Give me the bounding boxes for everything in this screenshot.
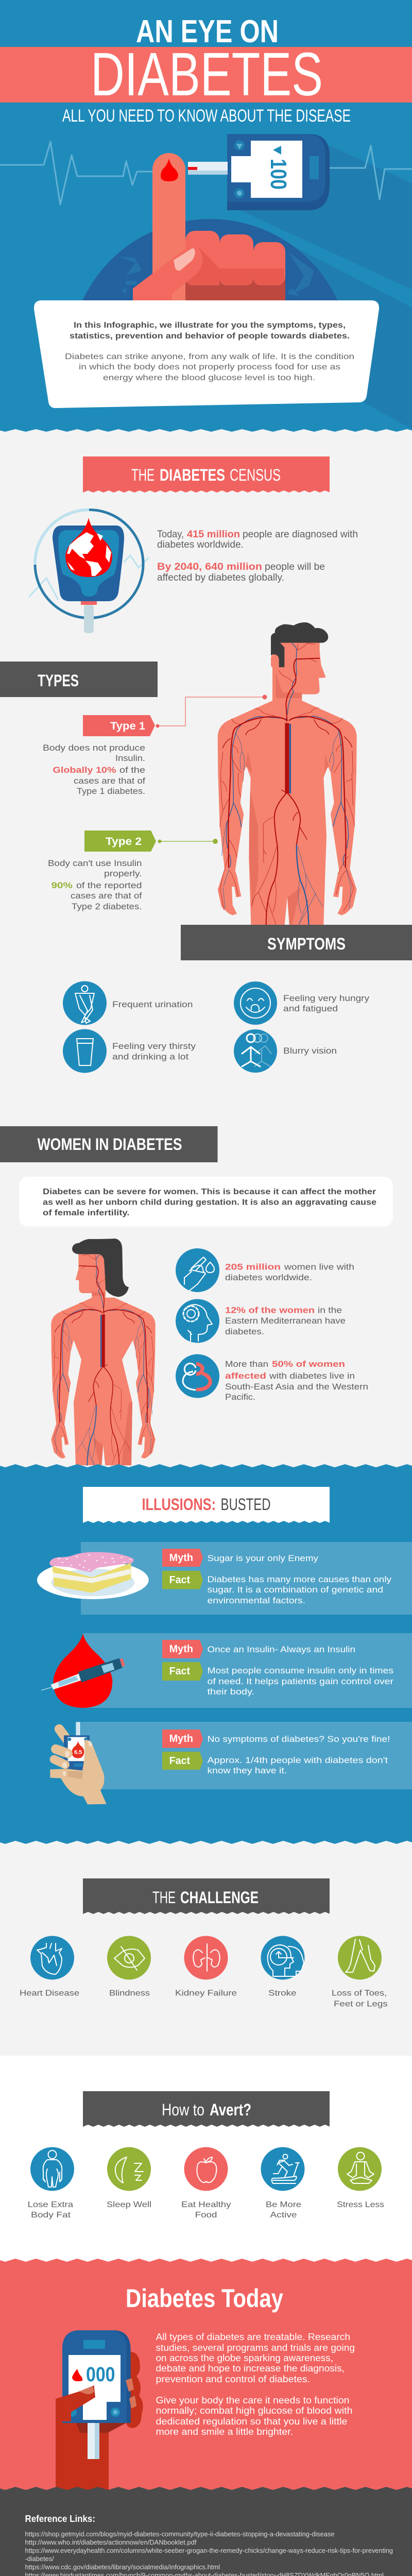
panel: myth 2: Most people consume insulin only in times xyxy=(207,1666,393,1675)
avert: lose body fat: Body Fat xyxy=(31,2211,71,2219)
avert: eat healthy food: Eat Healthy xyxy=(181,2200,231,2209)
connector: type 2 xyxy=(158,839,218,844)
panel: myth 1: environmental factors. xyxy=(207,1596,305,1605)
type 1 description: of the xyxy=(119,765,145,775)
stat: 12 percent xyxy=(225,1306,346,1336)
intro card: Diabetes can strike anyone, from any walk of life. It is the condition xyxy=(65,352,354,361)
type 1 description: cases are that of xyxy=(74,776,145,786)
panel: myth 3: know they have it. xyxy=(207,1766,287,1775)
panel: myth 1: Fact xyxy=(169,1574,190,1586)
census statistics: people are diagnosed with xyxy=(243,529,358,540)
label: blurry vision: Blurry vision xyxy=(283,1046,337,1056)
panel: myth 1: sugar. It is a combination of genetic and xyxy=(207,1585,383,1595)
challenge: blindness xyxy=(107,1936,151,1998)
challenge: heart disease xyxy=(20,1936,79,1998)
icon: mother and child xyxy=(176,1354,219,1398)
illustration: blood drop and insulin pen xyxy=(41,1634,125,1708)
heading: women in diabetes xyxy=(0,1126,217,1162)
type 2 description: of the reported xyxy=(76,880,142,890)
label: thirsty: and drinking a lot xyxy=(112,1052,188,1062)
challenge: heart disease: Heart Disease xyxy=(20,1989,79,1998)
illustration: cake on plate xyxy=(37,1552,149,1599)
challenge: loss of toes xyxy=(332,1936,387,2008)
women intro card: Diabetes can be severe for women. This is because it can affect the mother xyxy=(43,1188,376,1196)
stat: 12 percent: 12% of the women xyxy=(225,1306,315,1315)
women intro card: as well as her unborn child during gestation. It is also an aggravating cause xyxy=(43,1198,376,1207)
stat: 50 percent: with diabetes live in xyxy=(269,1371,355,1381)
heading: the challenge xyxy=(83,1878,330,1914)
icon: frequent urination xyxy=(63,981,107,1025)
globe behind hand xyxy=(82,219,338,300)
title: An Eye On: AN EYE ON xyxy=(136,14,279,49)
panel: myth 3 xyxy=(81,1722,412,1789)
text: diabetes today: normally; combat high glucose of blood with xyxy=(156,2405,352,2416)
icon: finger prick xyxy=(176,1248,219,1292)
reference link list xyxy=(25,2531,393,2576)
reference link list: https://www.everydayhealth.com/columns/white-seeber-grogan-the-remedy-chicks/change-ways-reduce-risk-tips-for-preventing xyxy=(25,2547,393,2554)
census statistics: affected by diabetes globally. xyxy=(157,572,284,583)
reference link list: http://www.who.int/diabetes/actionnow/en/DANbooklet.pdf xyxy=(25,2539,197,2546)
type 2 description: Body can't use Insulin xyxy=(48,858,142,868)
panel: myth 3: Fact xyxy=(169,1755,190,1767)
text: diabetes today xyxy=(156,2332,355,2437)
panel: myth 3: No symptoms of diabetes? So you're fine! xyxy=(207,1734,390,1744)
women intro card xyxy=(19,1177,393,1226)
tag: type 1 xyxy=(83,715,155,736)
avert: lose body fat: Lose Extra xyxy=(28,2200,73,2209)
label: thirsty xyxy=(112,1041,196,1062)
panel: myth 2: Myth xyxy=(169,1643,193,1655)
intro card: In this Infographic, we illustrate for you the symptoms, types, xyxy=(74,321,346,330)
panel: myth 2: Fact xyxy=(169,1666,190,1677)
label: hungry and fatigued xyxy=(283,993,370,1013)
reference link list: -diabetes/ xyxy=(25,2555,54,2563)
avert: be more active xyxy=(261,2147,305,2219)
glucose meter: 100 xyxy=(266,159,291,190)
heading: symptoms: SYMPTOMS xyxy=(267,935,346,953)
icon: meter with globe drop xyxy=(29,510,149,633)
panel: myth 2 xyxy=(83,1633,412,1708)
hand with finger prick xyxy=(133,153,285,300)
text: diabetes today: prevention and control of diabetes. xyxy=(156,2374,310,2384)
label: thirsty: Feeling very thirsty xyxy=(112,1041,196,1051)
heading: illusions busted xyxy=(83,1487,330,1523)
panel: myth 1 xyxy=(81,1542,412,1615)
census statistics: diabetes worldwide. xyxy=(157,539,244,550)
avert: eat healthy food xyxy=(181,2147,231,2219)
heading: women in diabetes: WOMEN IN DIABETES xyxy=(37,1135,182,1154)
panel: myth 3: Approx. 1/4th people with diabetes don't xyxy=(207,1755,388,1765)
title: diabetes today: Diabetes Today xyxy=(126,2284,283,2313)
illustration: hand holding meter xyxy=(50,1722,107,1804)
stat: 50 percent: Pacific. xyxy=(225,1392,255,1402)
stat: 50 percent xyxy=(225,1359,368,1402)
challenge: loss of toes: Loss of Toes, xyxy=(332,1989,387,1998)
avert: lose body fat xyxy=(28,2147,74,2219)
female body with blood vessels xyxy=(0,1239,412,1467)
male body with blood vessels xyxy=(218,622,357,925)
type 2 description: 90% xyxy=(52,880,73,890)
intro card: in which the body does not properly process food for use as xyxy=(79,363,340,371)
avert: be more active: Be More xyxy=(266,2200,301,2209)
panel: myth 2: their body. xyxy=(207,1687,254,1697)
stat: 12 percent: in the xyxy=(318,1306,342,1315)
stat: 50 percent: South-East Asia and the Western xyxy=(225,1382,368,1392)
census statistics: 415 million xyxy=(187,529,240,540)
icon: head with gear xyxy=(176,1299,219,1343)
type 1 description: Insulin. xyxy=(115,753,145,763)
heading: how to avert xyxy=(83,2091,330,2127)
intro card: energy where the blood glucose level is too high. xyxy=(103,374,315,382)
stat: 205 million xyxy=(225,1262,354,1282)
heading: how to avert: Avert? xyxy=(210,2100,251,2119)
reference link list: https://shop.getmyid.com/blogs/myid-diabetes-community/type-ii-diabetes-stopping-a-devastating-disease xyxy=(25,2531,335,2538)
label: hungry and fatigued: Feeling very hungry xyxy=(283,993,370,1003)
stat: 205 million: 205 million xyxy=(225,1262,281,1272)
intro card xyxy=(34,300,379,408)
text: diabetes today: dedicated regulation so that you live a little xyxy=(156,2416,347,2427)
illustration: hand with meter: 000 xyxy=(86,2363,115,2386)
type 2 description: properly. xyxy=(104,869,142,878)
census statistics: Today, xyxy=(157,529,184,540)
icon: hungry face xyxy=(234,981,277,1025)
census statistics: people will be xyxy=(265,562,325,572)
text: diabetes today: more and smile a little brighter. xyxy=(156,2427,293,2437)
challenge: kidney failure xyxy=(175,1936,237,1998)
heading: the diabetes census: CENSUS xyxy=(230,466,281,484)
panel: myth 1: Diabetes has many more causes than only xyxy=(207,1574,392,1584)
heartbeat line xyxy=(0,142,412,205)
type 1 description xyxy=(43,743,145,796)
reference link list: https://www.cdc.gov/diabetes/library/socialmedia/infographics.html xyxy=(25,2564,220,2571)
avert: be more active: Active xyxy=(270,2211,297,2219)
panel: myth 1: Myth xyxy=(169,1552,193,1564)
illustration: hand with meter xyxy=(56,2330,143,2490)
heading: symptoms xyxy=(181,925,412,960)
label: hungry and fatigued: and fatigued xyxy=(283,1004,338,1013)
type 1 description: Body does not produce xyxy=(43,743,145,753)
avert: sleep well: Sleep Well xyxy=(107,2200,151,2209)
type 2 description: Type 2 diabetes. xyxy=(72,902,142,911)
census statistics: By 2040, 640 million xyxy=(157,562,262,572)
heading: how to avert: How to xyxy=(162,2100,204,2119)
stat: 205 million: diabetes worldwide. xyxy=(225,1273,312,1282)
type 1 description: Type 1 diabetes. xyxy=(77,786,145,796)
title: Diabetes: DIABETES xyxy=(91,40,323,109)
heading: the challenge: THE xyxy=(152,1888,176,1907)
heading: types xyxy=(0,662,158,697)
stat: 50 percent: 50% of women xyxy=(272,1359,345,1369)
type 1 description: Globally 10% xyxy=(53,765,116,775)
census statistics xyxy=(157,529,358,583)
challenge: blindness: Blindness xyxy=(109,1989,150,1998)
glucose meter xyxy=(188,134,330,210)
heading: reference links: Reference Links: xyxy=(25,2514,95,2524)
stat: 50 percent: More than xyxy=(225,1359,268,1369)
panel: myth 2: of need. It helps patients gain control over xyxy=(207,1676,393,1686)
type 2 description xyxy=(48,858,142,911)
avert: sleep well xyxy=(107,2147,151,2209)
avert: stress less: Stress Less xyxy=(337,2200,384,2209)
heading: the diabetes census: DIABETES xyxy=(160,466,225,484)
intro card: statistics, prevention and behavior of people towards diabetes. xyxy=(70,332,350,341)
tag: type 2 xyxy=(84,831,156,852)
label: frequent urination: Frequent urination xyxy=(112,999,193,1009)
challenge: stroke xyxy=(261,1936,305,1998)
heading: illusions busted: ILLUSIONS: xyxy=(142,1495,216,1514)
text: diabetes today: studies, several programs and trials are going xyxy=(156,2343,355,2353)
text: diabetes today: All types of diabetes are treatable. Research xyxy=(156,2332,350,2342)
challenge: kidney failure: Kidney Failure xyxy=(175,1989,237,1998)
panel: myth 1: Sugar is your only Enemy xyxy=(207,1553,319,1563)
type 2 description: cases are that of xyxy=(71,891,142,901)
avert: stress less xyxy=(337,2147,384,2209)
heading: the challenge: CHALLENGE xyxy=(180,1888,259,1907)
connector: type 1 xyxy=(156,694,267,727)
panel: myth 2: Once an Insulin- Always an Insulin xyxy=(207,1645,355,1654)
hero long shadows xyxy=(227,143,412,429)
tag: type 1: Type 1 xyxy=(110,720,145,732)
stat: 205 million: women live with xyxy=(284,1262,354,1272)
text: diabetes today: debate and hope to increase the diagnosis, xyxy=(156,2363,345,2374)
women intro card: of female infertility. xyxy=(43,1209,130,1217)
heading: the diabetes census: THE xyxy=(131,466,154,484)
stat: 50 percent: affected xyxy=(225,1371,266,1381)
icon: thirst glass xyxy=(63,1029,107,1073)
heading: types: TYPES xyxy=(38,671,79,690)
text: diabetes today: on across the globe sparking awareness, xyxy=(156,2353,333,2363)
illustration: hand holding meter: 6.5 xyxy=(74,1749,82,1755)
stat: 12 percent: diabetes. xyxy=(225,1327,264,1336)
avert: eat healthy food: Food xyxy=(195,2211,217,2219)
text: diabetes today: Give your body the care it needs to function xyxy=(156,2395,349,2405)
challenge: loss of toes: Feet or Legs xyxy=(334,1999,387,2008)
tag: type 2: Type 2 xyxy=(106,836,142,848)
icon: blurry vision xyxy=(234,1029,277,1073)
challenge: stroke: Stroke xyxy=(268,1989,297,1998)
title band xyxy=(0,47,412,103)
heading: illusions busted: BUSTED xyxy=(220,1495,271,1514)
panel: myth 3: Myth xyxy=(169,1733,193,1744)
heading: the diabetes census xyxy=(83,456,330,493)
stat: 12 percent: Eastern Mediterranean have xyxy=(225,1316,346,1326)
